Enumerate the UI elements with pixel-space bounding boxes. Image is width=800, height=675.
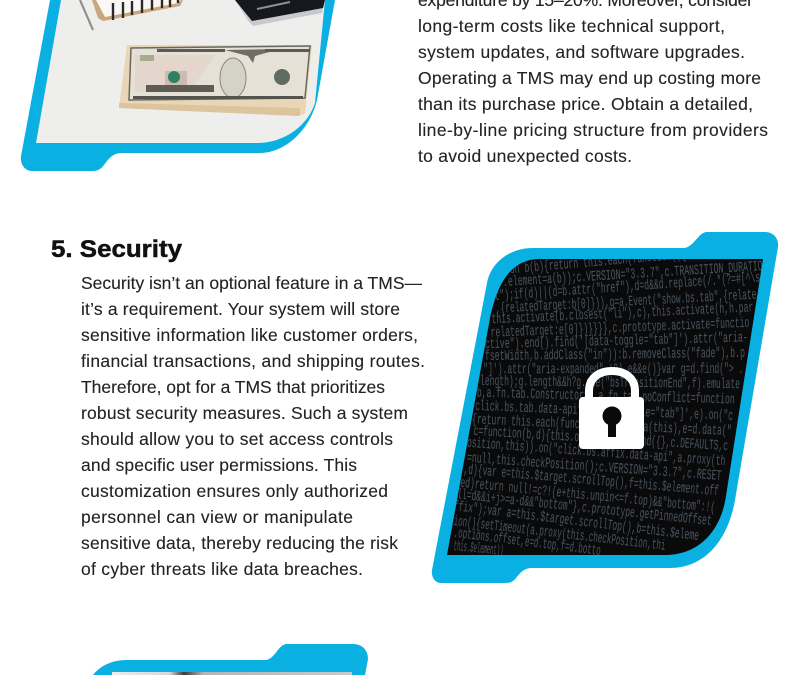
stack of dollar bills <box>119 45 312 116</box>
text block: cost paragraph: than its purchase price. Obtain a detailed, <box>418 94 753 114</box>
calculator <box>235 0 325 26</box>
text block: security paragraph: sensitive information like customer orders, <box>81 325 418 345</box>
text block: cost paragraph: to avoid unexpected costs. <box>418 146 632 166</box>
text block: security paragraph: personnel can view or manipulate <box>81 507 353 527</box>
code lines: .options.offset,e=d.top,f=d.botto <box>453 526 602 560</box>
text block: cost paragraph: long-term costs like technical support, <box>418 16 725 36</box>
text block: security paragraph: it’s a requirement. Your system will store <box>81 299 400 319</box>
text block: security paragraph <box>81 273 425 579</box>
panel: next section photo with blue frame <box>93 644 368 675</box>
text block: security paragraph: of cyber threats like data breaches. <box>81 559 363 579</box>
icon: padlock <box>579 371 644 449</box>
text block: security paragraph: customization ensures only authorized <box>81 481 388 501</box>
blue frame: security photo <box>432 232 778 583</box>
text block: cost paragraph: Operating a TMS may end up costing more <box>418 68 761 88</box>
blue frame: cost photo <box>21 0 335 171</box>
code lines: this.$element)) <box>453 539 504 560</box>
photo: desk with notebook, calculator and cash <box>30 0 330 145</box>
notebook <box>92 0 183 21</box>
photo: cropped top edge <box>112 672 352 675</box>
text block: security paragraph: sensitive data, thereby reducing the risk <box>81 533 398 553</box>
photo: source code on dark screen <box>440 247 770 560</box>
text block: security paragraph: robust security measures. Such a system <box>81 403 408 423</box>
heading: 5. Security: 5. Security <box>51 236 182 263</box>
text block: security paragraph: Therefore, opt for a TMS that prioritizes <box>81 377 385 397</box>
text block: cost paragraph <box>418 0 768 166</box>
pen <box>80 0 93 30</box>
text block: security paragraph: and specific user permissions. This <box>81 455 357 475</box>
code lines <box>453 247 763 560</box>
text block: security paragraph: should allow you to set access controls <box>81 429 393 449</box>
text block: security paragraph: Security isn’t an optional feature in a TMS— <box>81 273 422 293</box>
blue frame: next photo <box>93 644 368 675</box>
text block: security paragraph: financial transactions, and shipping routes. <box>81 351 425 371</box>
panel: security photo with blue frame <box>432 232 778 583</box>
panel: cost photo with blue frame <box>21 0 335 171</box>
text block: cost paragraph: system updates, and software upgrades. <box>418 42 745 62</box>
text block: cost paragraph: line-by-line pricing structure from providers <box>418 120 768 140</box>
